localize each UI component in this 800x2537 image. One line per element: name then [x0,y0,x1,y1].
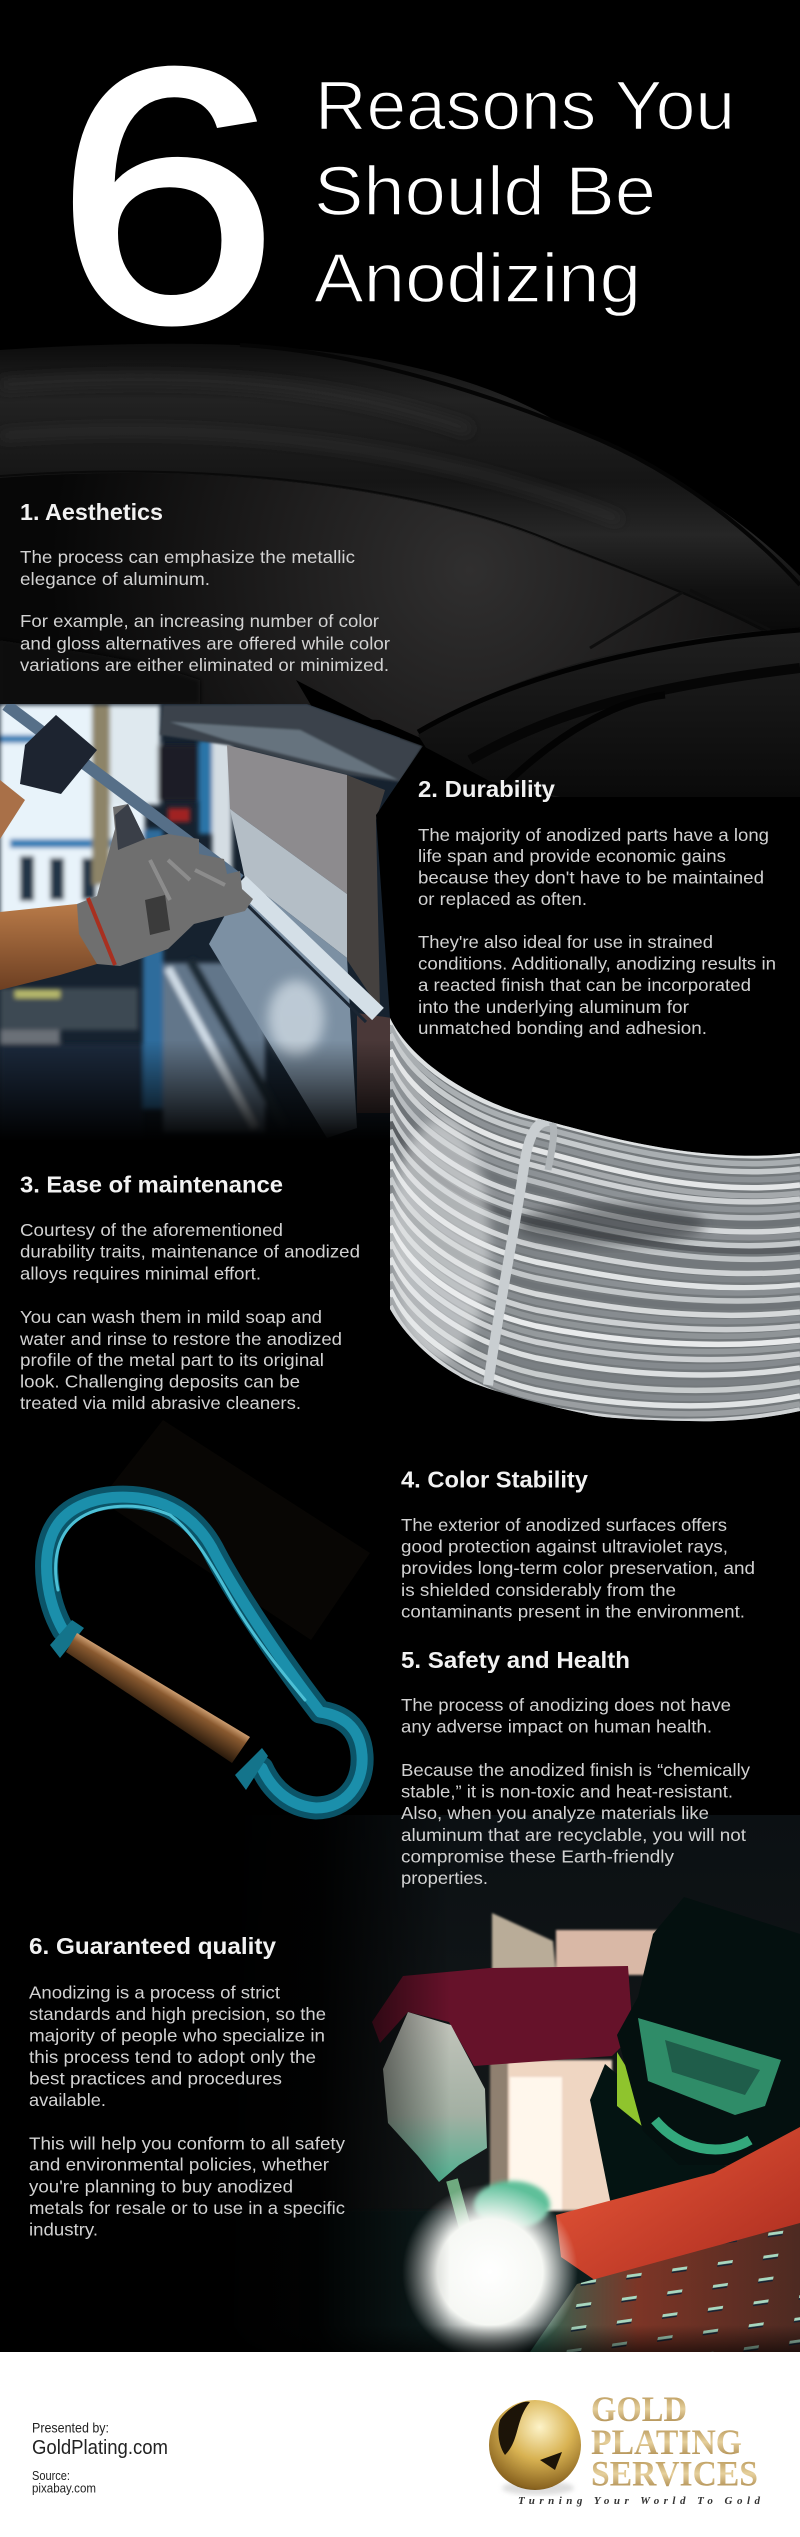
heading: 5. Safety and Health [401,1647,630,1673]
body text: provides long-term color preservation, and [401,1558,755,1578]
logo tagline: Turning Your World To Gold [518,2495,760,2507]
body text: industry. [29,2220,98,2240]
body text: compromise these Earth-friendly [401,1847,674,1867]
panel: tire rim background [0,344,800,800]
body text: a reacted finish that can be incorporated [418,975,751,995]
dark reflection on coil [515,1205,705,1245]
body text: aluminum that are recyclable, you will not [401,1825,746,1845]
body text: variations are either eliminated or minimized. [20,655,389,675]
source label: Source: [32,2468,70,2483]
body text: They're also ideal for use in strained [418,932,713,952]
dark side block [347,775,385,1010]
body text: you're planning to buy anodized [29,2176,293,2196]
section 4: Color Stability [401,1467,755,1622]
panel: hand holding steel bar photo [0,704,423,1144]
body text: Because the anodized finish is “chemically [401,1760,750,1780]
body text: water and rinse to restore the anodized [19,1329,342,1349]
section 5: Safety and Health [401,1647,750,1888]
section 2: Durability [418,776,776,1038]
panel: welder photo [346,1815,800,2352]
heading: 4. Color Stability [401,1467,588,1493]
machine top [160,704,423,782]
body text [401,1695,750,1888]
body text: The majority of anodized parts have a long [418,825,769,845]
body text: look. Challenging deposits can be [20,1372,300,1392]
body text [401,1515,755,1622]
logo wordmark: SERVICES [591,2454,758,2494]
title [56,0,735,397]
body text [20,547,390,675]
body text [29,1983,345,2240]
upper steel plate [227,745,347,894]
panel: galvanized wire coil photo [380,1010,800,1430]
title line 2: Should Be [314,152,656,230]
body text: Courtesy of the aforementioned [20,1220,283,1240]
upper hand [0,780,25,839]
big number 6: 6 [56,0,278,397]
section 3: Ease of maintenance [19,1172,360,1413]
table plate [530,2223,800,2352]
body text: and environmental policies, whether [29,2155,329,2175]
title line 1: Reasons You [315,66,735,144]
section 1: Aesthetics [20,499,390,675]
coil wires [390,1018,800,1421]
left fade to black [210,1815,450,2352]
body text: The process of anodizing does not have [401,1695,731,1715]
body text: The process can emphasize the metallic [20,547,355,567]
body text: treated via mild abrasive cleaners. [20,1393,301,1413]
tie wire [488,1121,552,1385]
source url: pixabay.com [32,2481,96,2496]
body text: or replaced as often. [418,889,587,909]
dark torso [590,2064,730,2210]
body text: stable,” it is non-toxic and heat-resistant. [401,1782,733,1802]
body text: For example, an increasing number of color [20,611,379,631]
body text: standards and high precision, so the [29,2004,326,2024]
gate barrel [66,1633,250,1763]
footer [0,2352,800,2537]
body text: metals for resale or to use in a specific [29,2198,345,2218]
visor [638,2018,781,2115]
body text: conditions. Additionally, anodizing results in [418,954,776,974]
logo: Gold Plating Services [489,2389,760,2507]
body text: any adverse impact on human health. [401,1717,712,1737]
body text: elegance of aluminum. [20,569,210,589]
body text [418,825,776,1038]
panel: carabiner photo [47,1420,370,1808]
heading: 6. Guaranteed quality [29,1933,276,1959]
website: GoldPlating.com [32,2437,168,2459]
gloved hand [383,2012,487,2182]
body text: available. [29,2090,106,2110]
body text: because they don't have to be maintained [418,868,764,888]
body text [19,1220,360,1413]
steel bar [6,705,240,880]
heading: 1. Aesthetics [20,499,163,525]
body text: You can wash them in mild soap and [20,1307,322,1327]
body text: and gloss alternatives are offered while color [20,634,390,654]
bottom shade [371,2326,800,2352]
neon vest [617,2052,642,2126]
panel: front rim arc [418,628,800,797]
body text: majority of people who specialize in [29,2026,325,2046]
body text: is shielded considerably from the [401,1580,676,1600]
logo wordmark [591,2389,758,2494]
blurred workshop background [0,705,285,1144]
presented by: Presented by: [32,2420,109,2436]
title line 3: Anodizing [314,239,641,317]
glove [77,804,253,966]
torch and flame glow [446,2178,469,2226]
body text: Anodizing is a process of strict [29,1983,280,2003]
gate collars [50,1620,84,1658]
forearm [0,904,97,990]
body text: profile of the metal part to its original [20,1350,324,1370]
helmet [617,1897,800,2165]
body text: unmatched bonding and adhesion. [418,1018,707,1038]
logo wordmark: GOLD [591,2389,687,2429]
heading: 2. Durability [418,776,555,802]
body text: The exterior of anodized surfaces offers [401,1515,727,1535]
body text: This will help you conform to all safety [29,2133,345,2153]
body text: best practices and procedures [29,2068,282,2088]
body text: good protection against ultraviolet rays, [401,1537,728,1557]
body text: durability traits, maintenance of anodized [20,1242,360,1262]
section 6: Guaranteed quality [29,1933,345,2240]
body text: Also, when you analyze materials like [401,1803,709,1823]
body text: alloys requires minimal effort. [20,1264,261,1284]
body text: contaminants present in the environment. [401,1602,745,1622]
red lower arm [556,2127,800,2285]
black panel behind durability text [296,680,800,1160]
lower steel plate [209,879,357,1138]
crimson sleeve [372,1966,633,2066]
body text: this process tend to adopt only the [29,2047,316,2067]
body text: into the underlying aluminum for [418,997,689,1017]
heading: 3. Ease of maintenance [20,1172,283,1198]
workshop background [404,1912,658,2336]
carabiner body [47,1497,362,1808]
body text: life span and provide economic gains [418,846,726,866]
icon: gold globe [489,2400,581,2495]
body text: properties. [401,1868,488,1888]
bottom fade [0,1040,400,1142]
logo wordmark: PLATING [591,2422,742,2462]
